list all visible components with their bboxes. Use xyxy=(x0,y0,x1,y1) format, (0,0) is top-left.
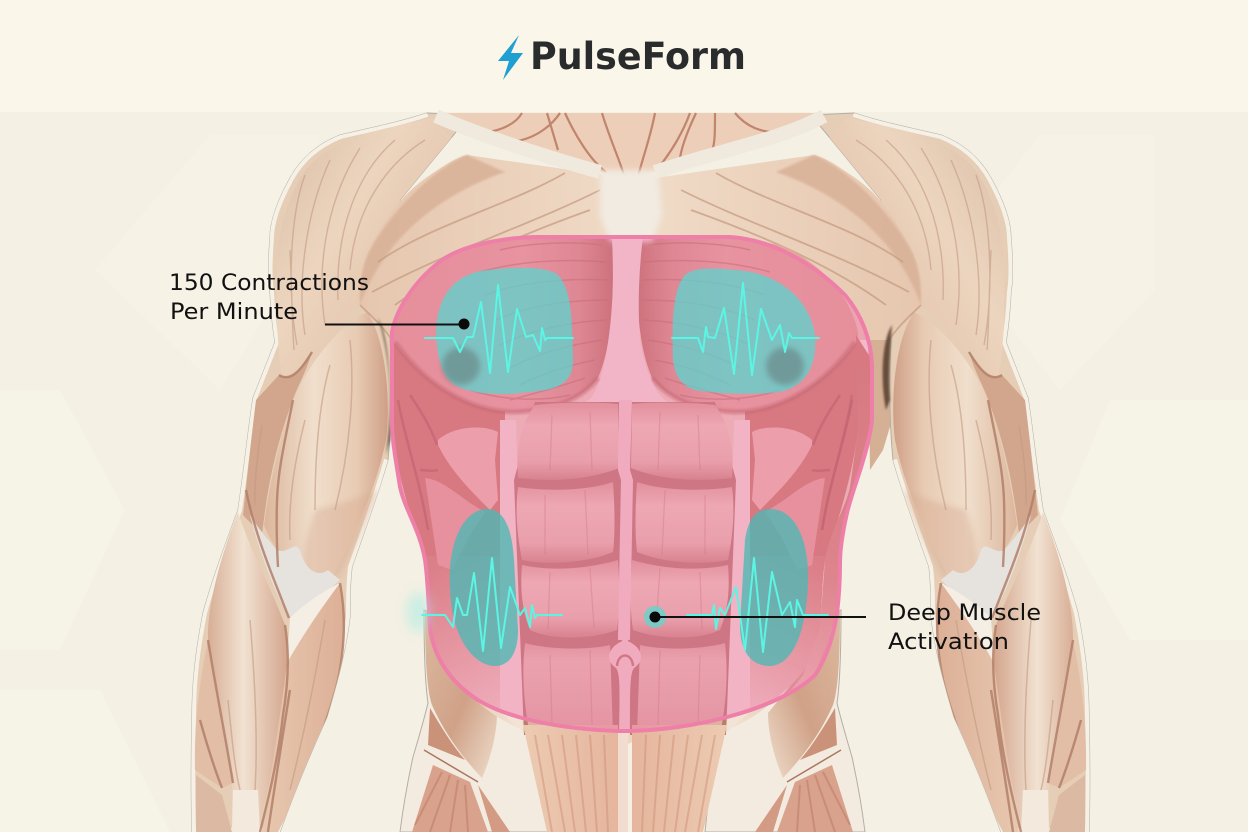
linea alba xyxy=(618,400,633,640)
callout line two: Per Minute xyxy=(170,300,298,325)
header band xyxy=(0,0,1248,112)
sternum upper xyxy=(600,170,662,242)
callout line two: Activation xyxy=(888,630,1009,655)
navel ring xyxy=(617,656,633,666)
logo xyxy=(498,35,746,80)
electrode pad: lower left xyxy=(450,509,518,666)
callout: deep muscle activation xyxy=(644,601,1041,655)
right torso muscles xyxy=(625,237,858,832)
logo wordmark: PulseForm xyxy=(530,35,746,78)
waveform lower left xyxy=(422,558,562,651)
left arm and shoulder xyxy=(191,113,470,832)
right armpit shadow xyxy=(883,325,892,410)
sternum plate xyxy=(585,237,668,402)
right upper chest xyxy=(641,155,922,340)
left armpit shadow xyxy=(378,318,390,455)
electrode pad: lower right xyxy=(740,509,808,666)
right arm and shoulder xyxy=(811,113,1090,832)
left upper chest xyxy=(360,155,640,340)
callout line one: Deep Muscle xyxy=(888,601,1041,626)
anchor glow xyxy=(644,606,666,628)
leader line xyxy=(325,324,464,326)
anatomical body figure xyxy=(191,113,1090,832)
waveform upper left xyxy=(425,285,573,373)
right flank muscle lines xyxy=(822,395,852,530)
left torso muscles xyxy=(392,237,625,832)
right underarm side xyxy=(868,330,895,470)
callout line one: 150 Contractions xyxy=(169,271,369,296)
electrode pad: upper left xyxy=(436,268,573,394)
right flank muscle strip xyxy=(788,335,872,694)
waveform upper right xyxy=(672,283,819,375)
waveform lower right xyxy=(687,558,828,652)
pink target zone overlay xyxy=(392,237,872,731)
nipple right xyxy=(766,347,804,385)
anchor dot xyxy=(650,612,660,622)
left side glow xyxy=(407,592,429,632)
right hip and groin xyxy=(705,610,865,832)
callout: 150 contractions xyxy=(169,271,470,330)
anchor dot xyxy=(458,318,470,330)
navel xyxy=(609,640,641,735)
pulse waveforms xyxy=(422,283,828,652)
leader line xyxy=(655,616,866,618)
logo lightning bolt icon xyxy=(498,35,523,80)
electrode pad: upper right xyxy=(673,268,815,394)
left hip and groin xyxy=(400,610,560,832)
neck and trapezius xyxy=(436,113,824,187)
center line below abdomen xyxy=(618,732,628,832)
nipple left xyxy=(442,347,480,385)
